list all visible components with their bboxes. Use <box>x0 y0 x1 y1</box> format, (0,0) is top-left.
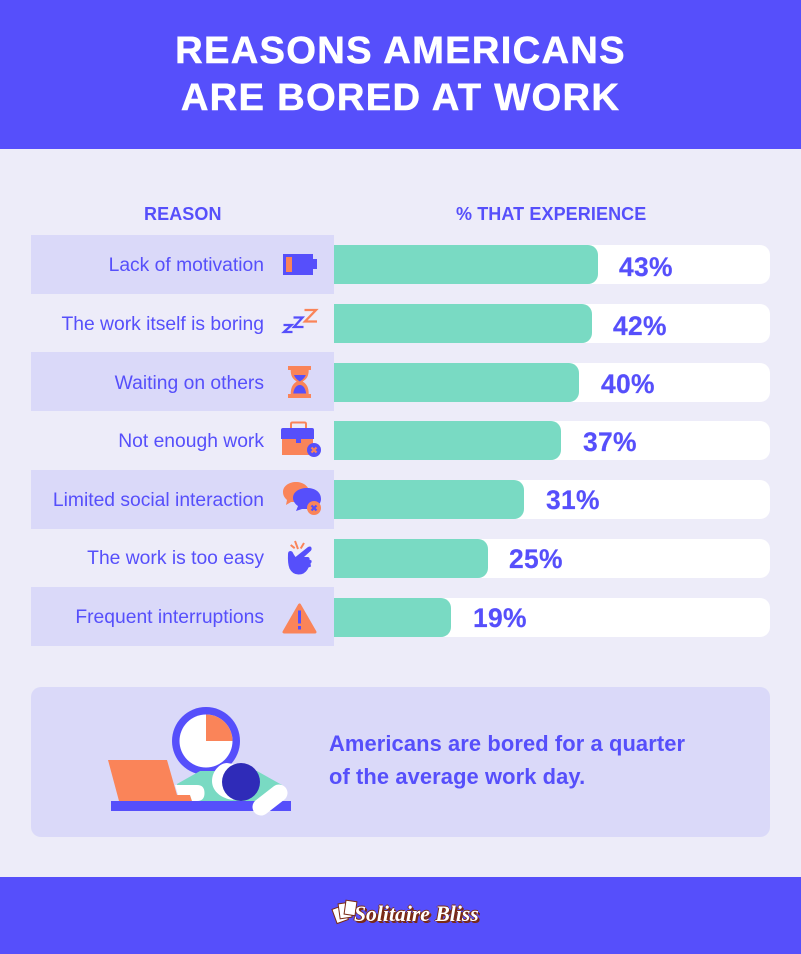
label: limited social interaction: Limited social interaction <box>53 490 264 511</box>
icon: snapping fingers <box>288 540 312 574</box>
label: work too easy: The work is too easy <box>87 548 264 569</box>
second arm <box>261 793 279 807</box>
callout panel <box>31 687 770 837</box>
row strip: waiting on others <box>31 352 334 411</box>
bar: 31% <box>334 480 770 519</box>
column heading: reason: REASON <box>144 204 222 224</box>
bar: 42% <box>334 304 770 343</box>
icon: low battery <box>283 254 317 275</box>
value: 40% <box>601 369 655 399</box>
bar: 19% <box>334 598 770 637</box>
value: 37% <box>583 427 637 457</box>
footer banner <box>0 877 801 954</box>
logo: wordmark: Solitaire Bliss <box>354 902 479 926</box>
row strip: frequent interruptions <box>31 587 334 646</box>
icon: hourglass <box>288 366 311 398</box>
clock <box>172 707 240 775</box>
value: 42% <box>613 311 667 341</box>
body <box>177 771 282 801</box>
column heading: percent: % THAT EXPERIENCE <box>456 204 646 224</box>
label: not enough work: Not enough work <box>118 431 264 452</box>
icon: chat bubbles with x <box>283 482 321 515</box>
header banner <box>0 0 801 149</box>
bar: 25% <box>334 539 770 578</box>
icon: warning triangle <box>282 603 316 634</box>
label: lack of motivation: Lack of motivation <box>109 255 264 276</box>
label: frequent interruptions: Frequent interruptions <box>75 607 264 628</box>
head <box>212 763 260 801</box>
bar: 43% <box>334 245 770 284</box>
callout text: of the average work day. <box>329 764 585 789</box>
value: 25% <box>509 544 563 574</box>
callout text <box>329 731 685 789</box>
value: 31% <box>546 485 600 515</box>
value: 19% <box>473 603 527 633</box>
row strip: lack of motivation <box>31 235 334 294</box>
bar: 40% <box>334 363 770 402</box>
title: REASONS AMERICANS <box>175 29 626 72</box>
illustration: worker asleep at desk <box>108 707 291 816</box>
callout text: Americans are bored for a quarter <box>329 731 685 756</box>
logo: cards icon <box>331 900 358 924</box>
title: ARE BORED AT WORK <box>181 76 620 119</box>
arm on laptop <box>175 785 204 801</box>
laptop <box>108 760 192 801</box>
row strip: limited social interaction <box>31 470 334 529</box>
icon: sleeping zzz <box>281 308 319 334</box>
icon: briefcase with x <box>281 422 321 457</box>
title <box>175 29 626 119</box>
label: work is boring: The work itself is boring <box>61 314 264 335</box>
value: 43% <box>619 252 673 282</box>
bar: 37% <box>334 421 770 460</box>
label: waiting on others: Waiting on others <box>115 373 264 394</box>
desk <box>111 801 291 811</box>
